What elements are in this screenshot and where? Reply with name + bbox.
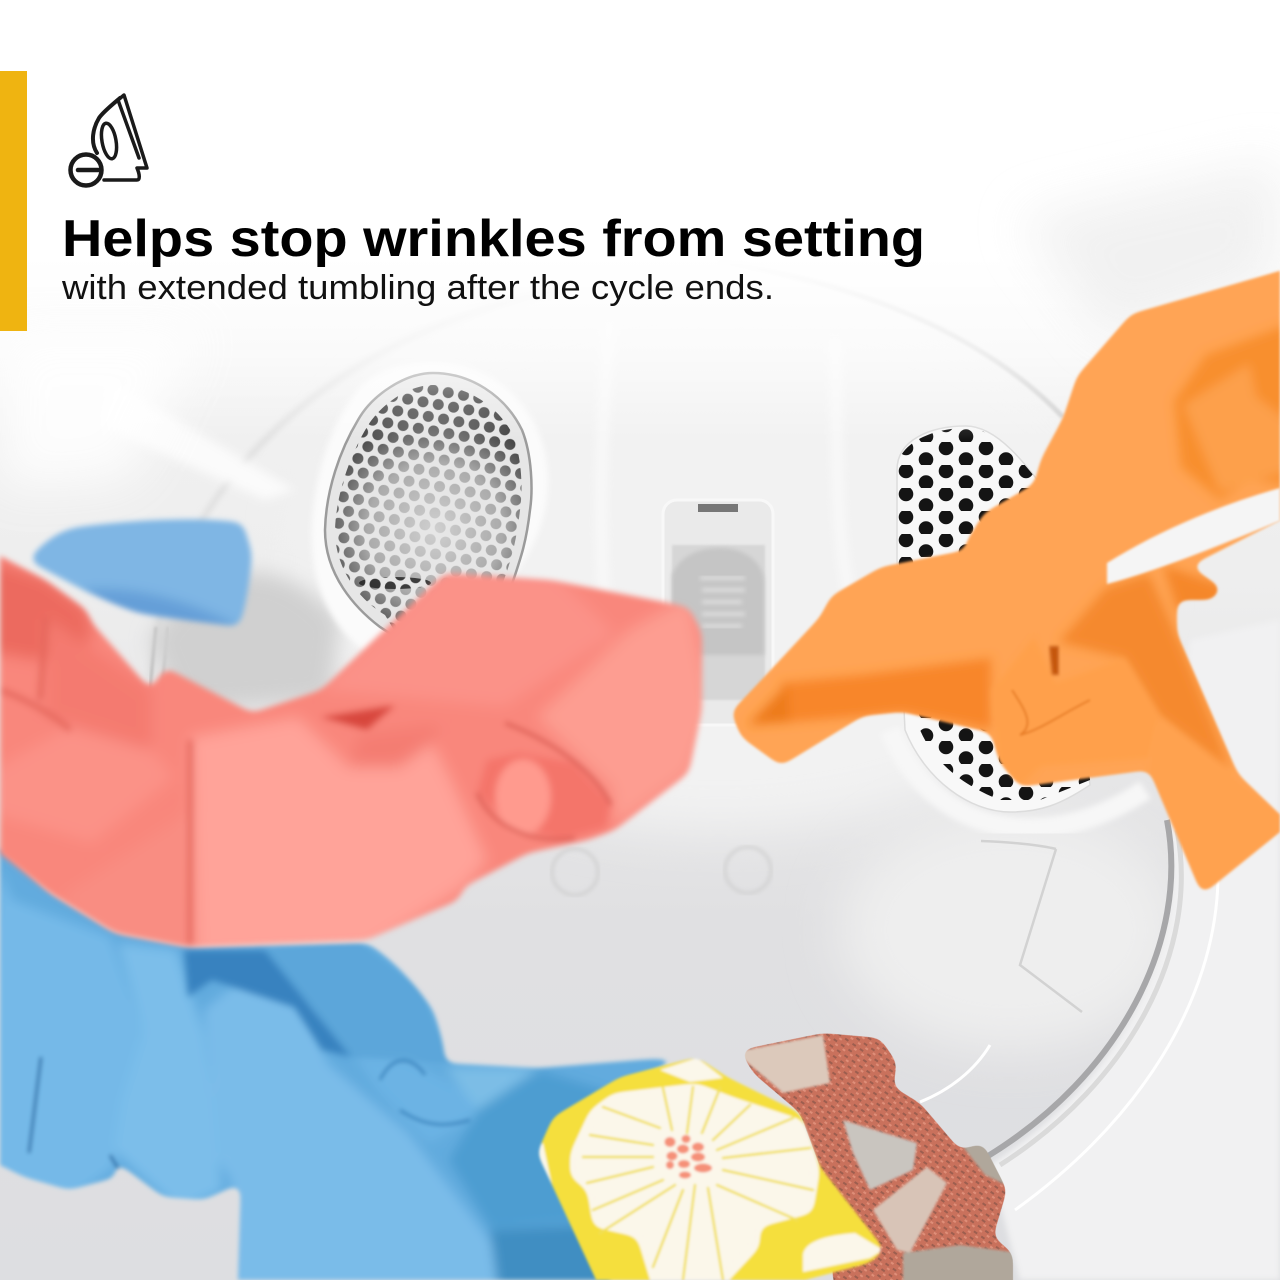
lower drum right brighter area bbox=[840, 810, 1180, 1050]
coral: left lobes bbox=[48, 624, 148, 742]
left white haze bbox=[0, 330, 200, 490]
lint screen housing bbox=[663, 500, 773, 725]
top white fade bbox=[0, 0, 1280, 440]
orange: dark slit bbox=[1049, 646, 1059, 675]
patterned: print lobes bbox=[903, 1245, 1020, 1280]
floral: secondary flowers bbox=[530, 1058, 883, 1272]
motion streak upper left bbox=[100, 380, 295, 500]
coral: light centre bbox=[190, 717, 487, 957]
lower bumps bbox=[552, 849, 598, 895]
floral: lower yellow fold bbox=[565, 1240, 627, 1280]
blue: bottom shaded part bbox=[488, 1222, 598, 1280]
raised panel highlights bbox=[601, 320, 850, 700]
coral: left crease lines bbox=[0, 617, 190, 945]
orange: inner band bbox=[781, 658, 991, 729]
cloth: patterned red-brown bbox=[730, 1025, 1030, 1280]
patterned: grey centre bbox=[843, 1120, 917, 1190]
cloth: yellow floral bbox=[520, 1040, 900, 1280]
blue: left lobe bbox=[0, 870, 143, 1200]
subheading: with extended tumbling after the cycle ends. bbox=[61, 269, 774, 307]
orange: bottom sleeve bbox=[1149, 716, 1280, 895]
blue: long sleeve bbox=[204, 980, 510, 1280]
right vent bbox=[896, 425, 1090, 812]
floral: main flower bbox=[570, 1083, 820, 1280]
lower-right white drum rim bbox=[990, 620, 1280, 1280]
blue: dark fold slits bbox=[29, 1057, 125, 1180]
flower centre bbox=[664, 1135, 712, 1178]
patterned: beige swatch top bbox=[735, 1035, 830, 1093]
blue: knot bbox=[376, 1062, 470, 1130]
cloth: small blue bbox=[30, 516, 256, 629]
patterned: beige swatch lower bbox=[873, 1167, 947, 1253]
heading: Helps stop wrinkles from setting bbox=[62, 210, 925, 268]
drum back wall highlight bbox=[300, 290, 1140, 830]
white rod bbox=[1107, 488, 1280, 584]
drum ring lines bbox=[150, 262, 1218, 1210]
blue: ribbed shoulder bbox=[265, 943, 450, 1063]
blue: dark shadow band bbox=[184, 950, 351, 1057]
cloth: coral bbox=[0, 530, 720, 960]
coral: right panel bbox=[540, 605, 703, 822]
icon: iron with minus sign bbox=[70, 95, 147, 186]
cloth: orange bbox=[720, 250, 1280, 910]
right vent recess ring bbox=[890, 730, 1145, 828]
blue: middle lobe bbox=[114, 943, 222, 1210]
coral: upper sheet bbox=[334, 574, 604, 702]
orange: fold under rod bbox=[1059, 574, 1231, 770]
coral: upper-left dark fold bbox=[0, 557, 92, 660]
accent bar bbox=[0, 71, 27, 331]
blue: right flap bbox=[445, 1067, 539, 1110]
left side shaded recess bbox=[150, 572, 340, 710]
coral: collar opening bbox=[477, 753, 611, 840]
orange: lower lobe bbox=[991, 637, 1159, 787]
orange: upper right folds bbox=[1174, 320, 1280, 500]
left vent bbox=[314, 372, 544, 646]
coral: dark slit bbox=[321, 705, 395, 730]
top-right grey corner haze bbox=[1020, 160, 1280, 340]
floral: petal lines bbox=[583, 1087, 813, 1280]
cloth: big blue bbox=[0, 848, 668, 1280]
